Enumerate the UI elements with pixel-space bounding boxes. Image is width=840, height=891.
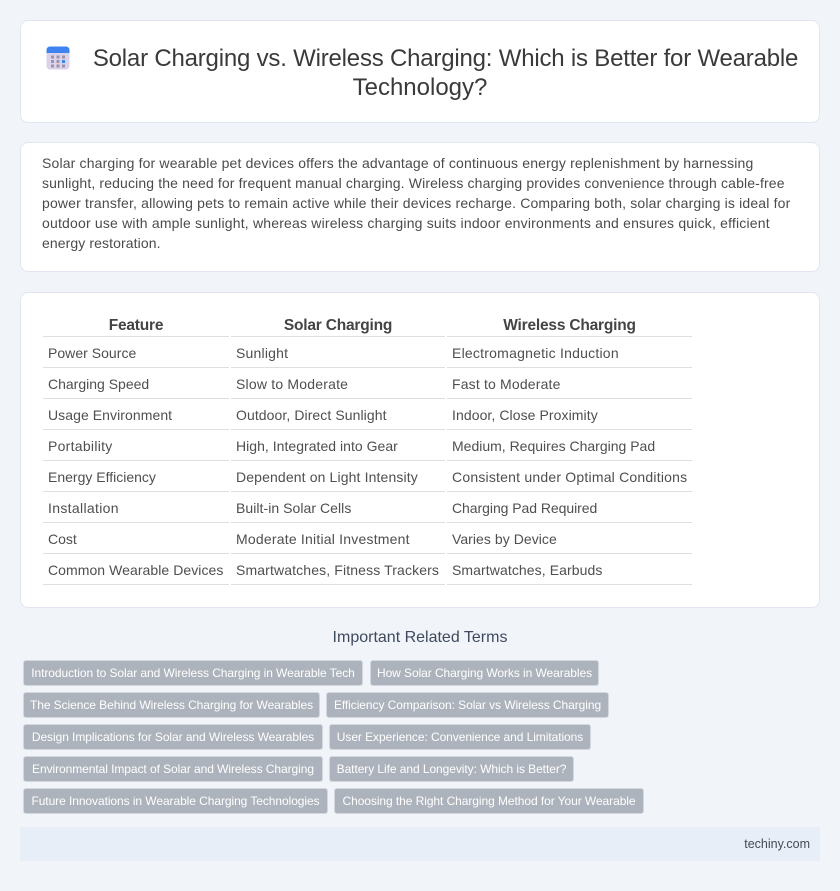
comparison table: [43, 317, 692, 585]
related terms tags: How Solar Charging Works in Wearables: [377, 666, 592, 680]
comparison table: Usage Environment: [48, 407, 172, 423]
comparison table: Fast to Moderate: [452, 376, 561, 392]
related terms tags: Future Innovations in Wearable Charging Technologies: [31, 794, 320, 808]
comparison table: Smartwatches, Earbuds: [452, 562, 603, 578]
comparison table: Varies by Device: [452, 531, 557, 547]
intro paragraph: sunlight, reducing the need for frequent manual charging. Wireless charging provides convenience through cable-free: [42, 175, 785, 191]
intro paragraph: [42, 155, 790, 251]
comparison table: Installation: [48, 500, 119, 516]
comparison table: Medium, Requires Charging Pad: [452, 438, 655, 454]
comparison table: Energy Efficiency: [48, 469, 156, 485]
related terms tags: Choosing the Right Charging Method for Your Wearable: [342, 794, 636, 808]
related terms tags: Design Implications for Solar and Wireless Wearables: [32, 730, 314, 744]
comparison table: Charging Pad Required: [452, 500, 597, 516]
comparison table: Moderate Initial Investment: [236, 531, 410, 547]
panel: introduction text: [20, 142, 820, 272]
comparison table: Power Source: [48, 345, 136, 361]
comparison table: Built-in Solar Cells: [236, 500, 351, 516]
footer bar: [20, 827, 820, 861]
comparison table: Electromagnetic Induction: [452, 345, 619, 361]
comparison table: Slow to Moderate: [236, 376, 348, 392]
comparison table: Common Wearable Devices: [48, 562, 223, 578]
comparison table: Charging Speed: [48, 376, 149, 392]
header panel: [20, 20, 820, 123]
comparison table: Sunlight: [236, 345, 288, 361]
intro paragraph: energy restoration.: [42, 235, 161, 251]
comparison table: Cost: [48, 531, 77, 547]
panel: comparison table: [20, 292, 820, 608]
comparison table: Wireless Charging: [503, 317, 636, 334]
related terms tags: The Science Behind Wireless Charging for Wearables: [30, 698, 313, 712]
title: [93, 45, 798, 101]
title: Solar Charging vs. Wireless Charging: Which is Better for Wearable: [93, 45, 798, 72]
comparison table: Portability: [48, 438, 113, 454]
comparison table: Feature: [109, 317, 163, 334]
intro paragraph: outdoor use with ample sunlight, whereas wireless charging suits indoor environments and ensures quick, efficient: [42, 215, 770, 231]
related terms tags: Environmental Impact of Solar and Wireless Charging: [32, 762, 314, 776]
comparison table: Solar Charging: [284, 317, 392, 334]
intro paragraph: Solar charging for wearable pet devices offers the advantage of continuous energy replenishment by harnessing: [42, 155, 753, 171]
heading: important related terms: Important Related Terms: [333, 629, 507, 646]
title: Technology?: [353, 74, 487, 101]
related terms tags: [23, 660, 644, 814]
related terms tags: User Experience: Convenience and Limitations: [337, 730, 583, 744]
icon: calendar: [46, 46, 70, 70]
related terms tags: Introduction to Solar and Wireless Charging in Wearable Tech: [31, 666, 355, 680]
comparison table: Consistent under Optimal Conditions: [452, 469, 687, 485]
comparison table: Outdoor, Direct Sunlight: [236, 407, 387, 423]
related terms tags: Battery Life and Longevity: Which is Better?: [337, 762, 566, 776]
comparison table: Indoor, Close Proximity: [452, 407, 598, 423]
related terms tags: Efficiency Comparison: Solar vs Wireless Charging: [334, 698, 601, 712]
footer source text: techiny.com: [744, 837, 810, 851]
comparison table: Smartwatches, Fitness Trackers: [236, 562, 439, 578]
intro paragraph: power transfer, allowing pets to remain active while their devices recharge. Comparing both, solar charging is ideal for: [42, 195, 790, 211]
comparison table: High, Integrated into Gear: [236, 438, 398, 454]
comparison table: Dependent on Light Intensity: [236, 469, 418, 485]
